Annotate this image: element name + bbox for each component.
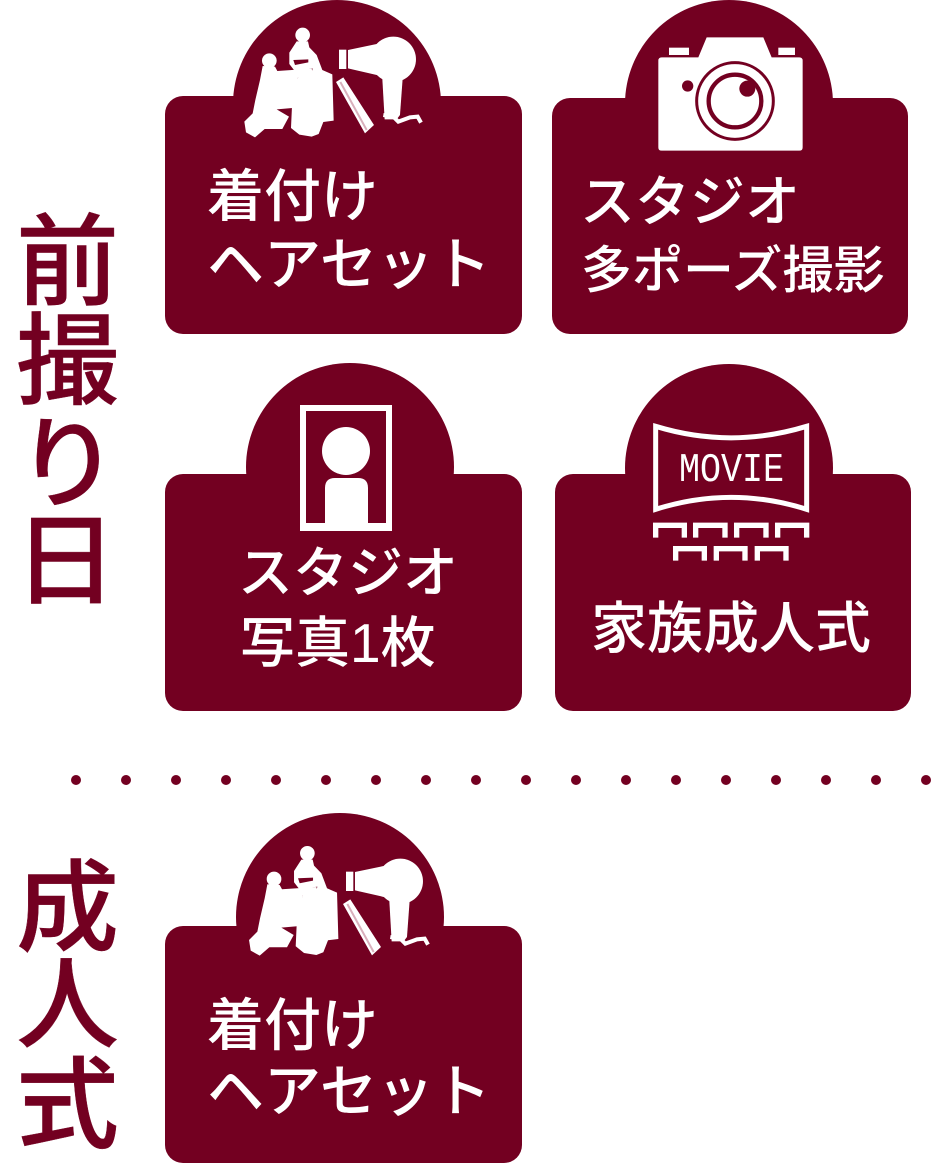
panel: スタジオ写真1枚 — [165, 363, 522, 711]
panel: 着付けヘアセット (前撮り日) — [165, 0, 522, 334]
label: 写真1枚 — [240, 612, 436, 674]
heading: 成人式 (vertical) — [16, 853, 119, 1162]
card background — [165, 0, 522, 334]
icon: movie theater: MOVIE — [679, 448, 784, 494]
label — [238, 542, 458, 674]
label: スタジオ — [238, 542, 458, 604]
panel: 着付けヘアセット (成人式) — [165, 813, 522, 1163]
icon: kimono dressing and hair dryer — [244, 28, 421, 137]
label — [207, 165, 491, 297]
label: 多ポーズ撮影 — [581, 242, 884, 299]
icon: movie theater — [656, 426, 807, 561]
label: 着付け — [207, 165, 378, 229]
card background — [552, 0, 908, 334]
heading: 成人式 (vertical): 式 — [16, 1050, 119, 1162]
panel: 家族成人式 — [555, 364, 911, 711]
icon: kimono dressing and hair dryer — [249, 846, 428, 956]
card background — [165, 363, 522, 711]
icon: camera — [658, 37, 803, 151]
heading: 前撮り日 (vertical): り — [16, 409, 119, 521]
panel: スタジオ多ポーズ撮影 — [552, 0, 908, 334]
label: ヘアセット — [207, 1060, 491, 1124]
label: スタジオ — [580, 171, 800, 233]
card background — [555, 364, 911, 711]
label: 着付け — [207, 994, 378, 1058]
heading: 前撮り日 (vertical): 撮 — [16, 306, 119, 418]
heading: 前撮り日 (vertical): 前 — [16, 207, 119, 319]
label — [207, 994, 491, 1124]
divider: dotted line — [71, 775, 931, 785]
heading: 前撮り日 (vertical): 日 — [14, 506, 117, 618]
label: 家族成人式 — [591, 597, 871, 660]
label: ヘアセット — [207, 233, 491, 297]
heading: 成人式 (vertical): 成 — [16, 853, 119, 965]
card background — [165, 813, 522, 1163]
heading: 成人式 (vertical): 人 — [16, 950, 119, 1062]
heading: 前撮り日 (vertical) — [14, 207, 119, 618]
label — [580, 171, 884, 299]
icon: portrait photo — [300, 405, 392, 531]
